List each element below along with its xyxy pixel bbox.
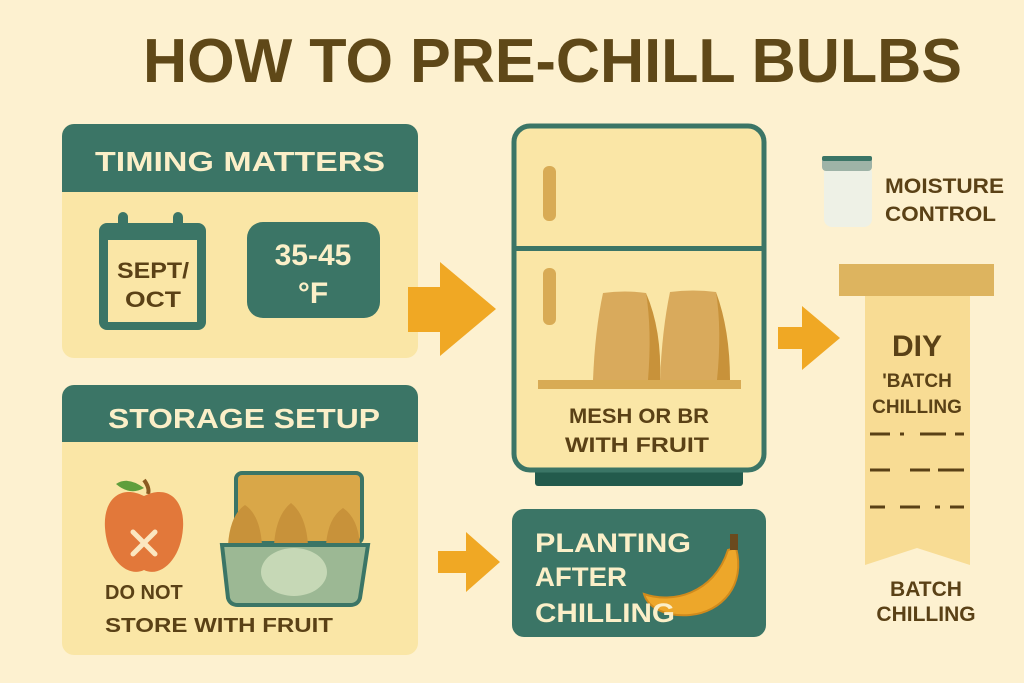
panel: planting after chilling: CHILLING bbox=[535, 598, 675, 628]
arrow 2 bbox=[438, 532, 500, 592]
panel: planting after chilling bbox=[512, 509, 766, 637]
banner: diy batch chilling: DIY bbox=[892, 330, 942, 363]
temperature box: °F bbox=[298, 277, 328, 310]
panel: timing matters bbox=[62, 124, 418, 358]
text: batch chilling bbox=[876, 578, 976, 626]
icon: jar bbox=[822, 156, 872, 227]
text: moisture control: MOISTURE bbox=[885, 175, 1004, 198]
fridge bbox=[514, 126, 764, 486]
fridge: WITH FRUIT bbox=[565, 434, 709, 457]
text: do not store with fruit: STORE WITH FRUIT bbox=[105, 615, 333, 637]
text: do not store with fruit bbox=[105, 582, 333, 637]
icon: banana bbox=[644, 548, 738, 615]
icon: calendar: SEPT/ bbox=[117, 258, 189, 283]
banner: diy batch chilling bbox=[839, 264, 994, 565]
temperature box: 35-45 bbox=[275, 239, 351, 272]
arrow 1 bbox=[408, 262, 496, 356]
title: HOW TO PRE-CHILL BULBS bbox=[143, 27, 962, 96]
panel: planting after chilling: PLANTING bbox=[535, 528, 691, 558]
text: batch chilling: BATCH bbox=[890, 578, 962, 601]
icon: calendar: OCT bbox=[125, 287, 182, 312]
heading: timing matters: TIMING MATTERS bbox=[95, 146, 385, 177]
icon: paper bags bbox=[538, 290, 741, 389]
text: moisture control bbox=[885, 175, 1004, 226]
temperature box bbox=[247, 222, 380, 318]
arrow 3 bbox=[778, 306, 840, 370]
text: batch chilling: CHILLING bbox=[876, 603, 976, 626]
icon: apple with x bbox=[105, 480, 183, 572]
text: moisture control: CONTROL bbox=[885, 203, 996, 226]
icon: basket of bulbs bbox=[222, 473, 368, 605]
text: mesh or br with fruit: MESH OR BR bbox=[569, 405, 709, 428]
panel: planting after chilling: AFTER bbox=[535, 562, 627, 592]
banner: diy batch chilling: CHILLING bbox=[872, 397, 962, 418]
panel: storage setup bbox=[62, 385, 418, 655]
icon: calendar bbox=[99, 212, 206, 330]
text: do not store with fruit: DO NOT bbox=[105, 582, 183, 604]
banner: diy batch chilling: 'BATCH bbox=[882, 371, 952, 392]
heading: storage setup: STORAGE SETUP bbox=[108, 403, 380, 434]
